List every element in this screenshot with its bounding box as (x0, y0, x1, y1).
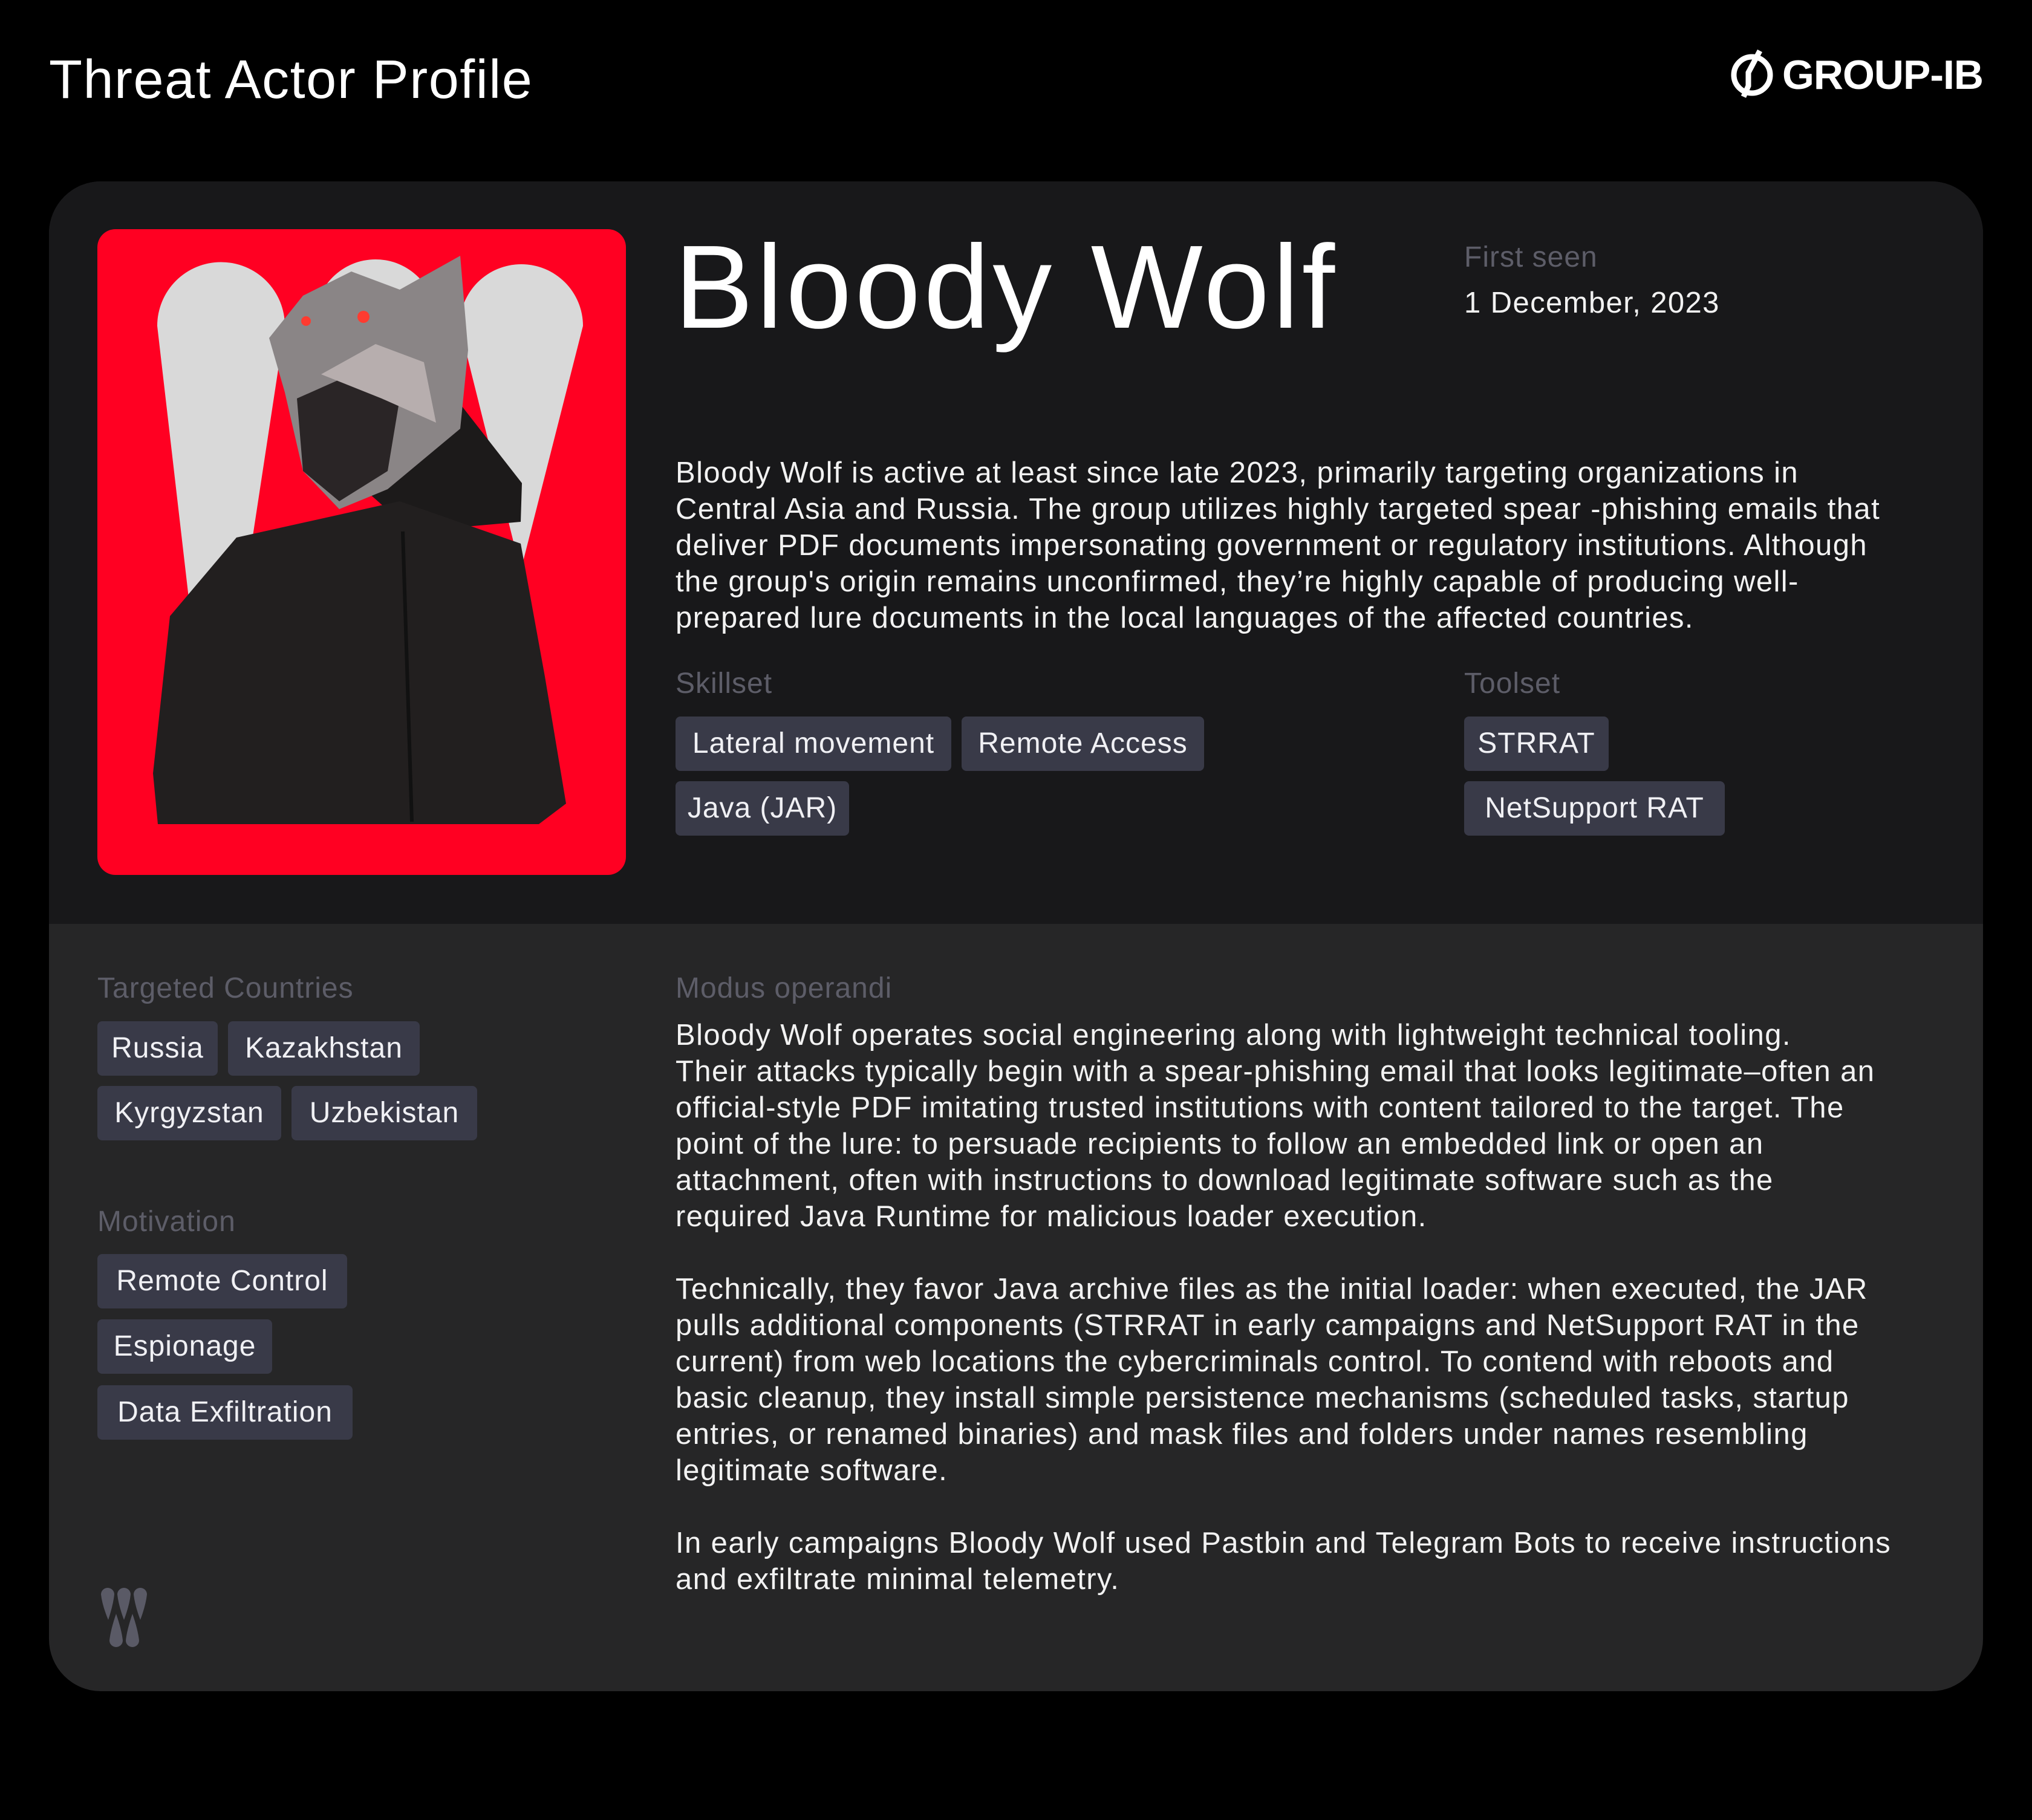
toolset: NetSupport RAT (1485, 792, 1704, 824)
modus operandi: pulls additional components (STRRAT in early campaigns and NetSupport RAT in the (676, 1309, 1860, 1342)
modus operandi: attachment, often with instructions to download legitimate software such as the (676, 1164, 1774, 1197)
skillset: Lateral movement (692, 727, 934, 759)
first seen: First seen (1464, 241, 1598, 273)
modus operandi: legitimate software. (676, 1454, 948, 1487)
icon: wolf teardrop mark (101, 1588, 147, 1647)
modus operandi: In early campaigns Bloody Wolf used Pastbin and Telegram Bots to receive instructions (676, 1527, 1891, 1559)
motivation: Data Exfiltration (117, 1396, 333, 1428)
toolset: Toolset (1464, 668, 1560, 700)
description: Central Asia and Russia. The group utilizes highly targeted spear -phishing emails that (676, 493, 1880, 525)
portrait (97, 229, 626, 875)
skillset: Remote Access (978, 727, 1188, 759)
modus operandi: Their attacks typically begin with a spear-phishing email that looks legitimate–often an (676, 1055, 1875, 1088)
description: the group's origin remains unconfirmed, they’re highly capable of producing well- (676, 565, 1799, 598)
targeted countries: Russia (111, 1032, 204, 1064)
toolset (1464, 668, 1725, 836)
panel: profile card (49, 181, 1983, 1691)
first seen: 1 December, 2023 (1464, 287, 1720, 319)
motivation: Motivation (97, 1206, 236, 1238)
targeted countries: Kyrgyzstan (114, 1097, 264, 1129)
logo: GROUP-IB: GROUP-IB (1782, 52, 1983, 98)
modus operandi: entries, or renamed binaries) and mask files and folders under names resembling (676, 1418, 1808, 1451)
skillset: Skillset (676, 668, 772, 700)
targeted countries: Kazakhstan (245, 1032, 403, 1064)
modus operandi: Technically, they favor Java archive files as the initial loader: when executed, the JAR (676, 1273, 1868, 1305)
modus operandi: point of the lure: to persuade recipients to follow an embedded link or open an (676, 1128, 1763, 1160)
skillset: Java (JAR) (688, 792, 837, 824)
skillset (676, 668, 1204, 836)
description: prepared lure documents in the local languages of the affected countries. (676, 602, 1694, 634)
targeted countries: Uzbekistan (310, 1097, 459, 1129)
motivation: Remote Control (116, 1265, 328, 1297)
modus operandi (676, 972, 1891, 1596)
motivation (97, 1206, 353, 1440)
heading: actor name: Bloody Wolf (674, 221, 1338, 353)
motivation: Espionage (114, 1330, 256, 1362)
modus operandi: Modus operandi (676, 972, 892, 1004)
title: Threat Actor Profile (49, 50, 533, 110)
first seen (1464, 241, 1720, 319)
targeted countries: Targeted Countries (97, 972, 354, 1004)
modus operandi: basic cleanup, they install simple persistence mechanisms (scheduled tasks, startup (676, 1382, 1849, 1414)
toolset: STRRAT (1477, 727, 1595, 759)
description: Bloody Wolf is active at least since late 2023, primarily targeting organizations in (676, 457, 1799, 489)
modus operandi: required Java Runtime for malicious loader execution. (676, 1200, 1427, 1233)
modus operandi: official-style PDF imitating trusted institutions with content tailored to the target. The (676, 1091, 1845, 1124)
modus operandi: and exfiltrate minimal telemetry. (676, 1563, 1119, 1596)
description (676, 457, 1880, 634)
targeted countries (97, 972, 477, 1140)
modus operandi: Bloody Wolf operates social engineering along with lightweight technical tooling. (676, 1019, 1791, 1051)
description: deliver PDF documents impersonating government or regulatory institutions. Although (676, 529, 1868, 562)
modus operandi: current) from web locations the cybercriminals control. To contend with reboots and (676, 1345, 1834, 1378)
